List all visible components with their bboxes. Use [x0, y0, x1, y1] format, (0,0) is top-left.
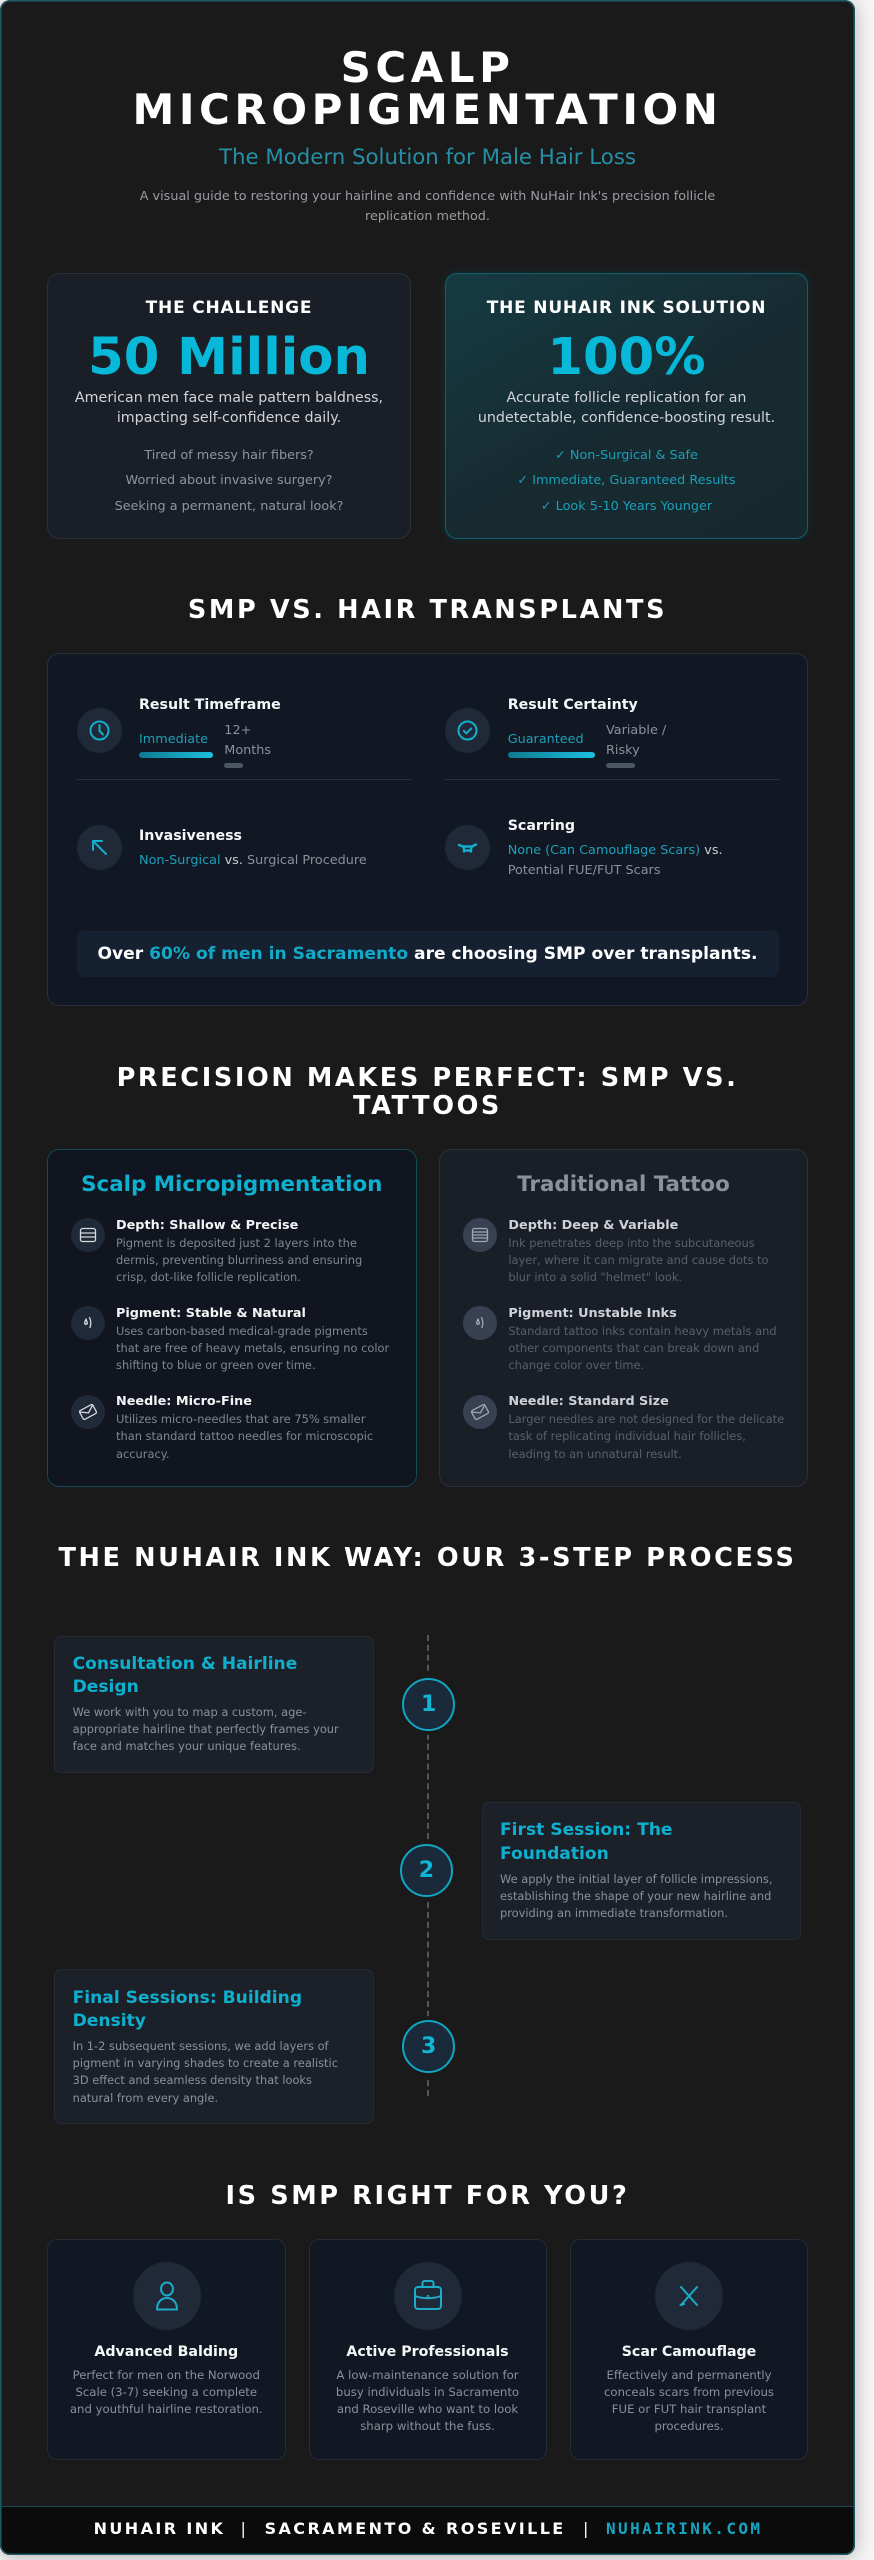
- transplant value: Variable /: [606, 722, 666, 738]
- step title: [500, 1820, 672, 1864]
- item text: Uses carbon-based medical-grade pigments: [116, 1324, 368, 1338]
- label: Result Timeframe: [139, 696, 281, 712]
- card text: procedures.: [654, 2419, 724, 2433]
- item title: Depth: Shallow & Precise: [116, 1218, 298, 1233]
- step text: 3D effect and seamless density that looks: [73, 2073, 312, 2087]
- label: Result Certainty: [508, 696, 638, 712]
- icon: person: [132, 2262, 200, 2330]
- item: pigment: [71, 1306, 390, 1372]
- item: needle: [71, 1394, 373, 1461]
- transplant value: 12+: [224, 722, 251, 738]
- panel: the challenge: [47, 272, 411, 538]
- intro text: A visual guide to restoring your hairline and confidence with NuHair Ink's precision follicle: [140, 189, 715, 204]
- icon: layers: [463, 1218, 497, 1252]
- challenge statistic: 50 Million: [88, 326, 370, 386]
- icon: pigment: [463, 1306, 497, 1340]
- panel: scalp micropigmentation: [47, 1148, 416, 1486]
- card text: [336, 2368, 519, 2433]
- solution benefits: [517, 448, 736, 514]
- item text: Ink penetrates deep into the subcutaneous: [508, 1236, 755, 1250]
- values: Non-Surgical vs. Surgical Procedure: [139, 852, 367, 868]
- step title: Consultation & Hairline: [73, 1654, 297, 1674]
- step 3 number: 3: [421, 2034, 436, 2059]
- row: invasiveness: [77, 825, 367, 870]
- item text: Standard tattoo inks contain heavy metals and: [508, 1324, 777, 1338]
- item text: [116, 1412, 373, 1461]
- challenge heading: THE CHALLENGE: [146, 298, 312, 318]
- card text: and youthful hairline restoration.: [70, 2402, 263, 2416]
- item text: Utilizes micro-needles that are 75% smaller: [116, 1412, 365, 1426]
- icon: clock: [76, 708, 122, 753]
- transplant value: Months: [224, 742, 271, 758]
- item text: [116, 1324, 390, 1372]
- SMP bar: [508, 752, 595, 758]
- row: result timeframe: [76, 690, 410, 780]
- card text: Scale (3-7) seeking a complete: [75, 2385, 257, 2399]
- step title: Foundation: [500, 1844, 609, 1864]
- challenge description: [75, 390, 383, 426]
- step title: First Session: The: [500, 1820, 672, 1840]
- step text: We work with you to map a custom, age-: [73, 1705, 306, 1719]
- label: Invasiveness: [139, 828, 242, 844]
- step text: In 1-2 subsequent sessions, we add layers of: [73, 2039, 329, 2053]
- callout text: Over 60% of men in Sacramento are choosing SMP over transplants.: [97, 944, 758, 964]
- challenge questions: Tired of messy hair fibers?: [144, 448, 314, 462]
- title: MICROPIGMENTATION: [133, 85, 722, 134]
- heading: candidates: IS SMP RIGHT FOR YOU?: [226, 2181, 629, 2211]
- item: depth: [71, 1218, 362, 1284]
- panel heading: Traditional Tattoo: [517, 1172, 730, 1197]
- item title: Pigment: Unstable Inks: [508, 1306, 677, 1321]
- item title: Needle: Micro-Fine: [116, 1394, 252, 1409]
- card title: Scar Camouflage: [622, 2344, 756, 2360]
- icon: arrow: [76, 824, 122, 870]
- solution benefits: ✓ Immediate, Guaranteed Results: [517, 473, 736, 488]
- intro text: [140, 189, 715, 224]
- step title: Design: [73, 1677, 139, 1697]
- card text: busy individuals in Sacramento: [336, 2385, 519, 2399]
- challenge description: American men face male pattern baldness,: [75, 390, 383, 406]
- solution statistic: 100%: [547, 326, 706, 386]
- card text: Perfect for men on the Norwood: [73, 2368, 260, 2382]
- step title: [73, 1654, 297, 1697]
- panel: the solution: [445, 272, 808, 538]
- step text: face and matches your unique features.: [73, 1739, 301, 1753]
- card: scar camouflage: [570, 2238, 808, 2460]
- row: scarring: [445, 818, 723, 878]
- item text: shifting to blue or green over time.: [116, 1358, 316, 1372]
- step 2 number: [400, 1844, 453, 1897]
- step 2 card: [482, 1802, 801, 1940]
- item text: blur into a solid "helmet" look.: [508, 1270, 682, 1284]
- challenge questions: [115, 448, 343, 514]
- card text: sharp without the fuss.: [360, 2419, 495, 2433]
- step 3 card: [54, 1969, 374, 2124]
- card text: conceals scars from previous: [604, 2385, 774, 2399]
- step text: appropriate hairline that perfectly frames your: [73, 1722, 339, 1736]
- values: None (Can Camouflage Scars) vs.: [508, 843, 723, 858]
- heading: SMP vs tattoos: [117, 1063, 738, 1121]
- step text: establishing the shape of your new hairline and: [500, 1889, 771, 1903]
- card text: and Roseville who want to look: [337, 2402, 518, 2416]
- transplant value: [224, 722, 271, 758]
- title: [133, 43, 722, 134]
- transplant value: [606, 722, 666, 758]
- step 3 number: [402, 2020, 455, 2073]
- icon: briefcase: [394, 2262, 462, 2330]
- card title: Active Professionals: [346, 2344, 509, 2360]
- icon: needle: [71, 1395, 105, 1429]
- step title: Final Sessions: Building: [73, 1988, 302, 2008]
- item text: than standard tattoo needles for microscopic: [116, 1429, 373, 1443]
- heading: SMP vs transplants: SMP VS. HAIR TRANSPLANTS: [188, 595, 667, 625]
- card text: Effectively and permanently: [606, 2368, 772, 2382]
- footer separator: |: [240, 2519, 246, 2538]
- footer website: NUHAIRINK.COM: [606, 2519, 762, 2538]
- item text: [116, 1236, 362, 1284]
- item text: accuracy.: [116, 1447, 169, 1461]
- heading: SMP vs tattoos: PRECISION MAKES PERFECT: SMP VS.: [117, 1063, 738, 1093]
- solution description: undetectable, confidence-boosting result.: [478, 410, 775, 426]
- item title: Depth: Deep & Variable: [508, 1218, 678, 1233]
- item text: dermis, preventing blurriness and ensuring: [116, 1253, 362, 1267]
- footer separator: |: [583, 2519, 588, 2538]
- item title: Pigment: Stable & Natural: [116, 1306, 306, 1321]
- intro text: replication method.: [365, 209, 490, 224]
- item title: Needle: Standard Size: [508, 1394, 669, 1409]
- challenge questions: Seeking a permanent, natural look?: [115, 499, 343, 514]
- item text: layer, where it can migrate and cause dots to: [508, 1253, 768, 1267]
- transplant bar: [224, 762, 243, 768]
- solution heading: THE NUHAIR INK SOLUTION: [487, 298, 766, 318]
- card title: Advanced Balding: [94, 2344, 238, 2360]
- step 1 number: 1: [421, 1692, 436, 1717]
- row: result certainty: [445, 690, 779, 780]
- subtitle: The Modern Solution for Male Hair Loss: [219, 144, 636, 170]
- process timeline: [54, 1635, 801, 2124]
- step 1 card: [54, 1636, 374, 1773]
- panel heading: Scalp Micropigmentation: [81, 1172, 382, 1197]
- item: depth: [463, 1218, 768, 1284]
- transplant value: Risky: [606, 742, 640, 758]
- SMP value: Guaranteed: [508, 732, 584, 747]
- card text: FUE or FUT hair transplant: [612, 2402, 766, 2416]
- footer: [0, 2506, 855, 2555]
- panel: traditional tattoo: [439, 1148, 808, 1486]
- icon: needle: [463, 1395, 497, 1429]
- challenge questions: Worried about invasive surgery?: [126, 473, 332, 488]
- solution benefits: ✓ Non-Surgical & Safe: [555, 448, 698, 462]
- heading: SMP vs tattoos: TATTOOS: [353, 1091, 502, 1121]
- transplant bar: [606, 762, 635, 768]
- values: Potential FUE/FUT Scars: [508, 863, 660, 878]
- step text: [73, 2039, 338, 2105]
- step text: [500, 1872, 772, 1920]
- footer location: SACRAMENTO & ROSEVILLE: [265, 2519, 566, 2538]
- solution description: [478, 390, 775, 426]
- icon: crossed blades: [655, 2262, 723, 2330]
- icon: pigment: [71, 1306, 105, 1340]
- heading: process: THE NUHAIR INK WAY: OUR 3-STEP PROCESS: [58, 1543, 797, 1573]
- step text: We apply the initial layer of follicle impressions,: [500, 1872, 772, 1886]
- item: needle: [463, 1394, 784, 1461]
- step text: [72, 1705, 339, 1753]
- dashed connector: [426, 1635, 428, 2096]
- SMP bar: [139, 752, 212, 758]
- step text: pigment in varying shades to create a realistic: [73, 2056, 338, 2070]
- callout: local statistic: [76, 930, 778, 976]
- item text: [508, 1324, 777, 1372]
- challenge description: impacting self-confidence daily.: [117, 410, 341, 426]
- step 1 number: [402, 1678, 455, 1731]
- title: SCALP: [341, 43, 514, 92]
- icon: scar: [445, 824, 490, 870]
- step title: Density: [73, 2011, 146, 2031]
- card: active professionals: [308, 2238, 546, 2460]
- item text: other components that can break down and: [508, 1341, 759, 1355]
- values: [508, 843, 723, 878]
- step 2 number: 2: [419, 1858, 434, 1883]
- label: Scarring: [508, 818, 575, 834]
- card text: [70, 2368, 263, 2416]
- step text: natural from every angle.: [73, 2091, 218, 2105]
- item text: leading to an unnatural result.: [508, 1447, 682, 1461]
- item: pigment: [463, 1306, 777, 1372]
- solution benefits: ✓ Look 5-10 Years Younger: [541, 499, 712, 514]
- card: advanced balding: [47, 2238, 286, 2460]
- panel: comparison with transplants: [47, 652, 808, 1006]
- item text: task of replicating individual hair follicles,: [508, 1429, 746, 1443]
- step text: providing an immediate transformation.: [500, 1906, 728, 1920]
- footer brand: NUHAIR INK: [94, 2519, 225, 2538]
- item text: that are free of heavy metals, ensuring no color: [116, 1341, 389, 1355]
- card text: A low-maintenance solution for: [336, 2368, 519, 2382]
- item text: [508, 1236, 768, 1284]
- item text: Larger needles are not designed for the delicate: [508, 1412, 784, 1426]
- solution description: Accurate follicle replication for an: [507, 390, 746, 406]
- item text: change color over time.: [508, 1358, 644, 1372]
- card text: [604, 2368, 774, 2433]
- item text: Pigment is deposited just 2 layers into the: [116, 1236, 357, 1250]
- item text: crisp, dot-like follicle replication.: [116, 1270, 301, 1284]
- step title: [73, 1988, 302, 2031]
- SMP value: Immediate: [139, 732, 208, 747]
- icon: layers: [71, 1218, 105, 1252]
- icon: check circle: [445, 708, 490, 753]
- item text: [508, 1412, 784, 1461]
